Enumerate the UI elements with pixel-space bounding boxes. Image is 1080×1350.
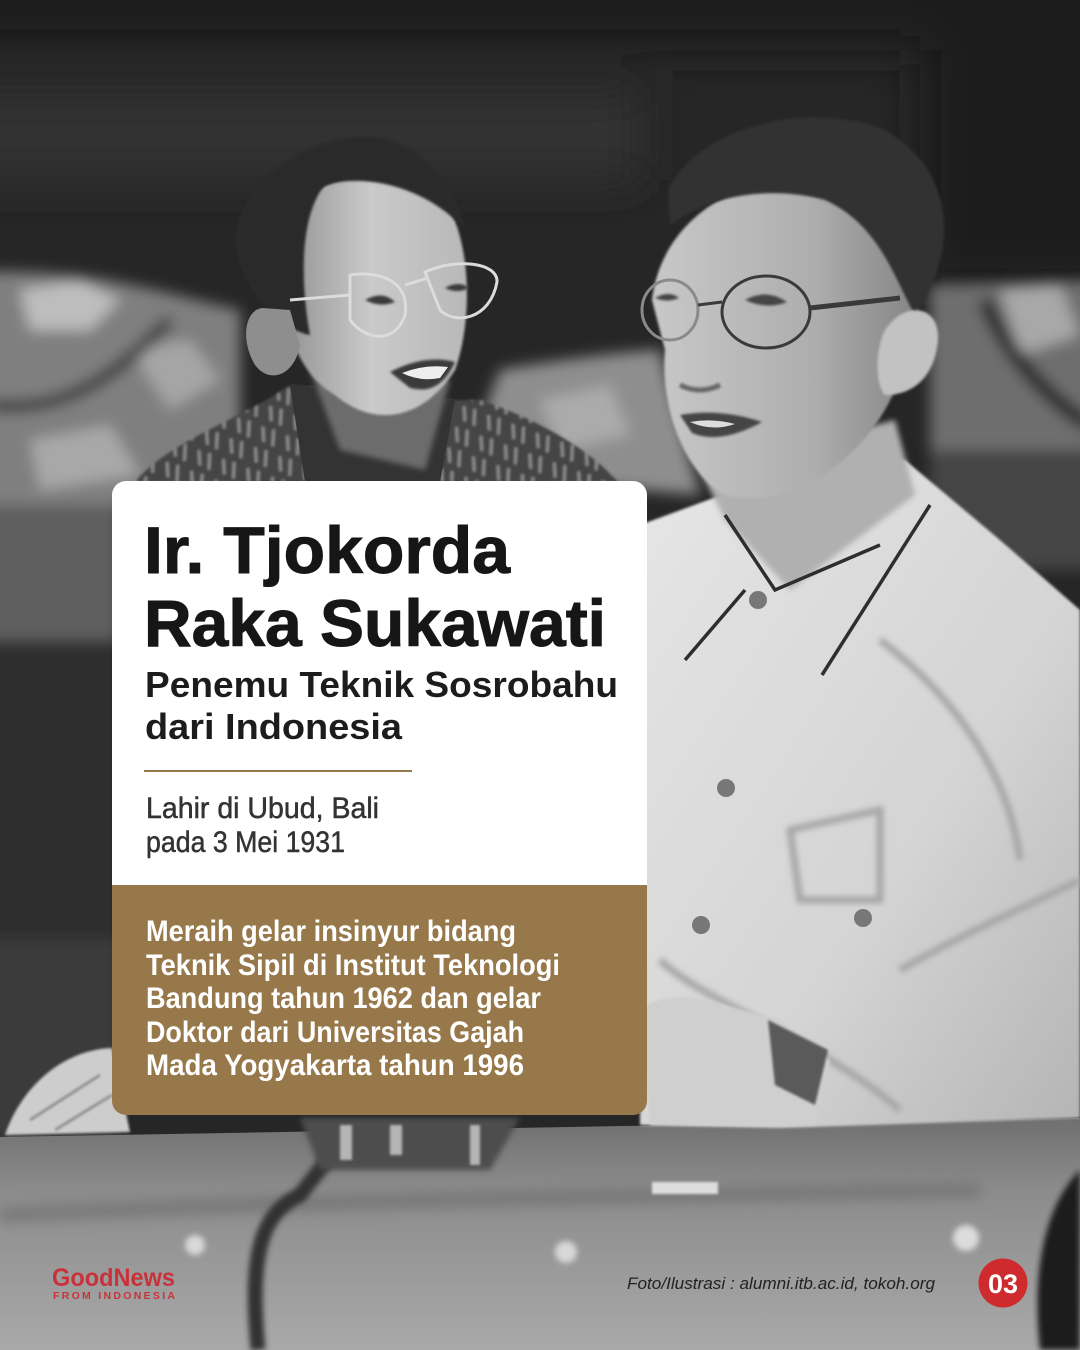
education text: Mada Yogyakarta tahun 1996 xyxy=(146,1049,524,1082)
logo: GoodNews from Indonesia: FROM INDONESIA xyxy=(53,1290,175,1302)
education text: Bandung tahun 1962 dan gelar xyxy=(146,982,541,1015)
ear xyxy=(878,310,938,395)
facial features xyxy=(365,284,469,390)
collar and placket xyxy=(685,505,930,675)
birth text: Lahir di Ubud, Bali xyxy=(146,792,379,825)
head xyxy=(652,175,919,498)
photo: table in foreground xyxy=(0,1118,1080,1350)
card: brown section xyxy=(112,885,647,1115)
facial features xyxy=(655,294,787,437)
logo: GoodNews from Indonesia: GoodNews xyxy=(52,1264,175,1292)
title xyxy=(144,513,606,660)
neck xyxy=(700,420,915,590)
education text: Doktor dari Universitas Gajah xyxy=(146,1016,524,1049)
shirt xyxy=(640,460,1080,1128)
hair xyxy=(235,136,465,335)
shirt folds and buttons xyxy=(660,640,1080,1110)
neck xyxy=(310,370,450,470)
birth text: pada 3 Mei 1931 xyxy=(146,826,345,859)
forearm and watch xyxy=(640,997,830,1125)
head xyxy=(275,174,467,415)
subtitle: dari Indonesia xyxy=(145,706,403,747)
subtitle xyxy=(145,664,618,747)
glasses xyxy=(642,276,900,348)
education text: Teknik Sipil di Institut Teknologi xyxy=(146,949,560,982)
divider xyxy=(144,770,412,772)
photo: left hand on table xyxy=(5,1048,130,1135)
info card xyxy=(112,481,647,1115)
page number badge xyxy=(978,1258,1028,1308)
ear xyxy=(246,308,300,375)
page number badge: 03 xyxy=(988,1269,1018,1299)
education text xyxy=(146,915,560,1082)
photo: man with glasses and batik shirt xyxy=(135,136,618,482)
photo: man in white shirt xyxy=(640,117,1080,1128)
title: Raka Sukawati xyxy=(144,586,606,660)
birth text xyxy=(146,792,379,859)
collar xyxy=(290,385,455,482)
hair xyxy=(668,117,944,315)
card: white section xyxy=(112,481,647,885)
education text: Meraih gelar insinyur bidang xyxy=(146,915,516,948)
batik shirt xyxy=(135,385,618,482)
photo credit: Foto/Ilustrasi : alumni.itb.ac.id, tokoh.org xyxy=(627,1274,936,1293)
title: Ir. Tjokorda xyxy=(144,513,511,587)
subtitle: Penemu Teknik Sosrobahu xyxy=(145,664,618,705)
glasses xyxy=(290,264,497,336)
